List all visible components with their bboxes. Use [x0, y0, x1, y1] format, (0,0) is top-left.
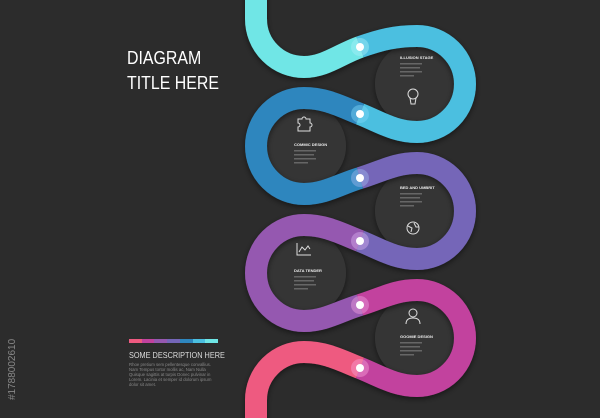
- circle texts: [294, 55, 435, 339]
- icon: person: [406, 309, 420, 324]
- description text: Rhoe pretium sem pellentesque convallius. Nam Tempus tortor mollis ac, Nam Nulla Quisque sagittis at turpis Donec pulvinar in Lorem. Lacinia et semper id dolorum ipsum dolor sit amet.: [129, 362, 211, 387]
- description heading: SOME DESCRIPTION HERE: [129, 350, 225, 360]
- title: [127, 47, 219, 93]
- circle texts: BED AND UMBRIT: [400, 185, 435, 190]
- ribbon: [256, 0, 465, 418]
- circles: [262, 42, 459, 380]
- circle texts: GOOMIE DESIGN: [400, 334, 433, 339]
- icon: bulb: [408, 89, 418, 104]
- color bar: [129, 339, 218, 343]
- title: DIAGRAM: [127, 47, 201, 68]
- side id text: #1788002610: [7, 339, 18, 400]
- dots: [351, 38, 369, 377]
- title: TITLE HERE: [127, 72, 219, 93]
- icon: globe: [407, 222, 419, 234]
- circle texts: COMMIC DESIGN: [294, 142, 327, 147]
- circle texts: ILLUSION STAGE: [400, 55, 434, 60]
- icon: chart: [297, 243, 311, 255]
- circle texts: DATA TENDER: [294, 268, 322, 273]
- icon: puzzle: [298, 117, 312, 131]
